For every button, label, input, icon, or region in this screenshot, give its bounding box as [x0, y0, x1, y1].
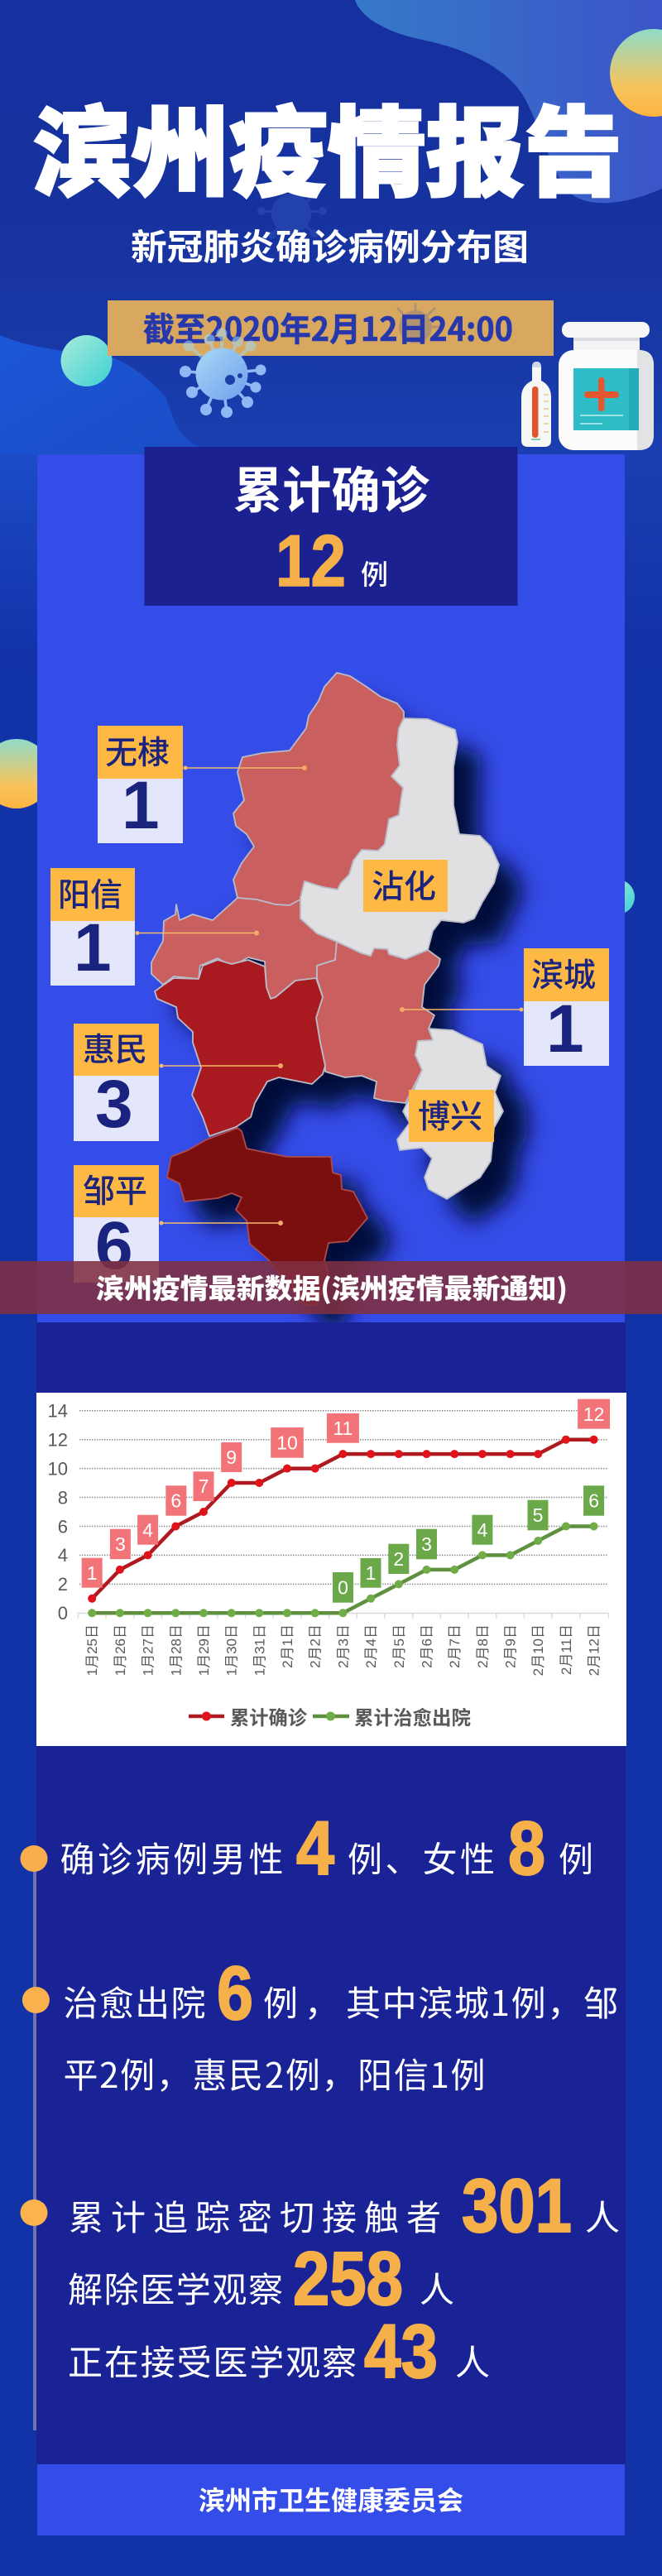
text: gender split: 4 [296, 1806, 334, 1891]
x axis labels: 2月2日 [308, 1624, 324, 1668]
heading: 累计确诊 [233, 451, 430, 523]
data labels: discharged: 2 [393, 1548, 404, 1570]
x axis labels: 2月5日 [391, 1624, 407, 1668]
y axis labels [48, 1400, 68, 1624]
text: discharged: ， [305, 1976, 339, 2027]
district: Zhanhua [300, 718, 499, 959]
x axis labels: 2月7日 [447, 1624, 463, 1668]
footer band [37, 2464, 625, 2535]
side ball right [625, 881, 635, 913]
x axis labels: 1月25日 [84, 1624, 100, 1676]
chart legend: 累计确诊 [230, 1702, 307, 1730]
x axis labels: 1月30日 [224, 1624, 240, 1676]
footer band: 滨州市卫生健康委员会 [199, 2480, 463, 2518]
x axis labels: 2月10日 [530, 1624, 546, 1676]
text: close contacts: 人 [585, 2190, 620, 2241]
label: Huimin: 惠民 [83, 1024, 147, 1071]
text: gender split: 8 [508, 1806, 545, 1891]
y axis labels: 8 [58, 1488, 68, 1508]
panel: lower navy section [36, 1322, 626, 2464]
data labels: discharged: 1 [366, 1562, 376, 1584]
data labels: confirmed: 4 [142, 1519, 153, 1541]
label: Huimin: 3 [95, 1067, 133, 1142]
y axis labels: 0 [58, 1603, 68, 1624]
header background [0, 0, 662, 669]
series: cumulative discharged [88, 1523, 598, 1617]
data labels: discharged: 3 [421, 1533, 432, 1555]
text: discharged: 6 [217, 1951, 253, 2036]
text: discharged: 治愈出院 [63, 1976, 205, 2027]
number 12: 12 [276, 520, 346, 602]
district: Huimin [155, 960, 325, 1136]
x axis labels: 1月29日 [196, 1624, 212, 1676]
data labels: confirmed: 6 [170, 1489, 181, 1511]
label: Zhanhua: 沾化 [372, 861, 436, 908]
data labels: discharged: 5 [533, 1504, 543, 1526]
data labels: confirmed: 9 [226, 1446, 237, 1468]
text: close contacts: 258 [293, 2237, 403, 2321]
x axis labels: 2月6日 [419, 1624, 435, 1668]
text: gender split: 例、女性 [348, 1832, 495, 1883]
data labels: confirmed: 3 [115, 1533, 126, 1555]
text: gender split [60, 1806, 593, 1891]
panel: map background [37, 454, 625, 1322]
label: Wudi: 无棣 [105, 727, 170, 774]
label: Zouping: 邹平 [83, 1166, 147, 1212]
x axis labels: 1月27日 [141, 1624, 156, 1676]
title: 滨州疫情报告 [33, 74, 622, 216]
data labels: discharged: 4 [477, 1519, 488, 1541]
chart legend: 累计治愈出院 [354, 1702, 471, 1730]
faint virus behind title [257, 194, 327, 247]
x axis labels: 2月9日 [503, 1624, 519, 1668]
text: discharged: 例 [263, 1976, 298, 2027]
caption strip [0, 1261, 662, 1314]
label: Zhanhua [363, 860, 448, 912]
date banner: 截至2020年2月12日24:00 [143, 303, 513, 351]
text: close contacts: 301 [462, 2164, 572, 2248]
timeline [20, 1845, 50, 2430]
series: cumulative confirmed [88, 1436, 598, 1603]
text: gender split: 例 [559, 1832, 593, 1883]
label: Wudi [98, 726, 307, 843]
text: close contacts: 累计追踪密切接触者 [69, 2190, 441, 2241]
label: Zouping: 6 [95, 1208, 133, 1283]
subtitle: 新冠肺炎确诊病例分布图 [131, 219, 529, 271]
x axis labels: 2月1日 [280, 1624, 295, 1668]
text: close contacts: 43 [364, 2310, 438, 2394]
x axis labels: 2月12日 [587, 1624, 602, 1676]
y axis labels: 14 [48, 1400, 68, 1422]
label: Bincheng: 滨城 [531, 950, 596, 996]
data labels: confirmed: 10 [276, 1432, 298, 1453]
text: discharged: 平2例，惠民2例，阳信1例 [63, 2048, 485, 2099]
decorative ball top right [610, 29, 662, 117]
label: Boxing: 博兴 [418, 1091, 482, 1138]
label: Bincheng: 1 [546, 991, 584, 1067]
x axis labels: 1月28日 [168, 1624, 184, 1676]
label: Huimin [74, 1024, 283, 1142]
data labels: discharged: 0 [338, 1577, 348, 1599]
y axis labels: 2 [58, 1574, 68, 1595]
chart legend [189, 1702, 471, 1730]
text: close contacts: 人 [420, 2262, 454, 2313]
unit: 例 [361, 553, 388, 592]
y axis labels: 10 [48, 1458, 68, 1480]
text: gender split: 确诊病例男性 [60, 1832, 283, 1883]
y axis labels: 4 [58, 1545, 68, 1566]
side ball left [0, 739, 37, 808]
district: Boxing [397, 1029, 503, 1199]
text: close contacts [68, 2164, 620, 2394]
text: discharged: 其中滨城1例，邹 [346, 1976, 618, 2027]
data labels: discharged [333, 1485, 604, 1603]
icon: medicine bottle [559, 322, 654, 450]
icon: virus [180, 328, 266, 418]
map of Binzhou districts [151, 673, 503, 1305]
label: Yangxin: 阳信 [58, 870, 122, 916]
y axis labels: 12 [48, 1430, 68, 1450]
x axis labels: 1月31日 [252, 1624, 267, 1676]
district: Zouping [167, 1128, 367, 1305]
icon: thermometer [521, 362, 551, 447]
text: close contacts: 正在接受医学观察 [68, 2335, 357, 2386]
x axis labels: 1月26日 [113, 1624, 128, 1676]
data labels: discharged: 6 [588, 1489, 599, 1511]
decorative ball teal [61, 335, 113, 386]
text: discharged [63, 1951, 618, 2099]
x axis labels [84, 1624, 602, 1676]
x axis labels: 2月8日 [475, 1624, 491, 1668]
label: Wudi: 1 [122, 768, 160, 843]
x axis labels: 2月4日 [363, 1624, 379, 1668]
label: Boxing [409, 1090, 494, 1142]
district: Wudi [233, 673, 404, 905]
data labels: confirmed: 1 [87, 1562, 98, 1584]
label: Zouping [74, 1165, 283, 1283]
line chart [36, 1393, 626, 1746]
label: Yangxin: 1 [74, 910, 112, 986]
x axis labels: 2月11日 [559, 1624, 574, 1675]
label: Bincheng [400, 948, 609, 1067]
caption strip: 滨州疫情最新数据(滨州疫情最新通知) [96, 1267, 568, 1307]
district: Yangxin [151, 898, 337, 999]
x axis labels: 2月3日 [335, 1624, 351, 1668]
label: Yangxin [50, 868, 259, 986]
text: close contacts: 解除医学观察 [68, 2262, 283, 2313]
map shadow [176, 698, 528, 1330]
data labels: confirmed: 7 [199, 1475, 209, 1497]
data labels: confirmed: 11 [333, 1418, 353, 1439]
panel: cumulative confirmed [144, 447, 518, 606]
data labels: confirmed [82, 1399, 610, 1588]
district: Bincheng [316, 942, 440, 1103]
y axis labels: 6 [58, 1516, 68, 1537]
text: close contacts: 人 [455, 2335, 490, 2386]
data labels: confirmed: 12 [583, 1403, 604, 1425]
